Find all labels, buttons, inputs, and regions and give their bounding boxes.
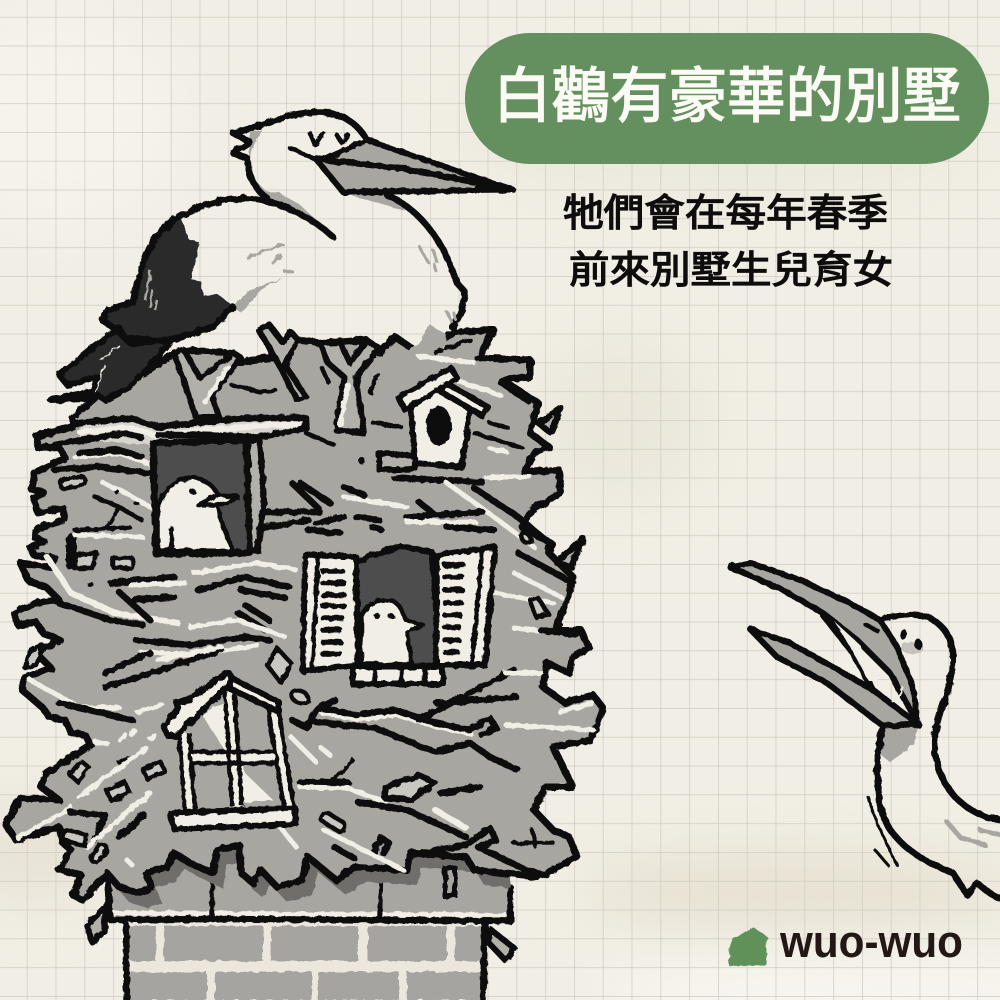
window three: [164, 672, 296, 829]
opening: [356, 546, 440, 668]
chick two: [361, 600, 423, 664]
subtitle text: 前來別墅生兒育女: [569, 250, 893, 292]
feather marks: [947, 822, 1000, 845]
lower nest lines right: [267, 648, 593, 896]
long plank above window: [40, 418, 306, 445]
gray shadow behind nest top: [405, 332, 445, 358]
mullions: [192, 690, 275, 807]
logo wordmark: wuo-wuo: [779, 916, 963, 967]
sill: [353, 667, 443, 684]
top branches: [174, 325, 530, 433]
window two with shutters: [303, 546, 495, 684]
thorn and leaves: [69, 408, 583, 567]
birdhouse: [398, 368, 488, 467]
roof: [84, 850, 518, 964]
sill: [170, 808, 296, 829]
nest body: [6, 325, 603, 900]
roof planks: [164, 672, 234, 736]
title pill: [465, 33, 989, 164]
upper beak: [730, 563, 918, 725]
feather marks: [248, 244, 456, 322]
glass reflection: [202, 700, 273, 803]
logo house icon: [730, 928, 766, 965]
chick one: [158, 478, 238, 551]
left shutter: [303, 555, 358, 671]
lower nest lines left: [18, 647, 221, 865]
hole: [426, 406, 452, 446]
subtitle text: 牠們會在每年春季: [563, 193, 888, 235]
dark wing: [102, 217, 233, 343]
mouth inner lines: [823, 615, 873, 690]
throat shadow: [881, 725, 918, 762]
window one with chick: [153, 440, 264, 554]
branch lines right: [261, 422, 577, 635]
motion lines: [868, 797, 897, 865]
subtitle text: [563, 193, 893, 292]
shadows: [190, 130, 447, 352]
chimney: [126, 918, 485, 1000]
beak: [316, 140, 513, 192]
diamond knot: [267, 648, 291, 683]
small stick near birdhouse: [379, 453, 415, 470]
lower beak: [750, 629, 918, 726]
dark tail: [59, 327, 170, 400]
head and neck: [880, 615, 1000, 820]
roof shadow: [120, 850, 511, 908]
stick left of chimney: [87, 905, 107, 942]
branch lines left: [25, 450, 296, 668]
title text: 白鸛有豪華的別墅: [493, 63, 961, 130]
top stork: [59, 112, 513, 400]
oval knot: [289, 688, 311, 706]
right shutter: [436, 547, 495, 665]
eyes: [900, 630, 908, 640]
right stork: [730, 563, 1000, 898]
stick right of chimney: [488, 929, 514, 960]
eyes: [310, 133, 348, 145]
cheek shadow: [901, 642, 923, 654]
outlines: [102, 199, 333, 320]
